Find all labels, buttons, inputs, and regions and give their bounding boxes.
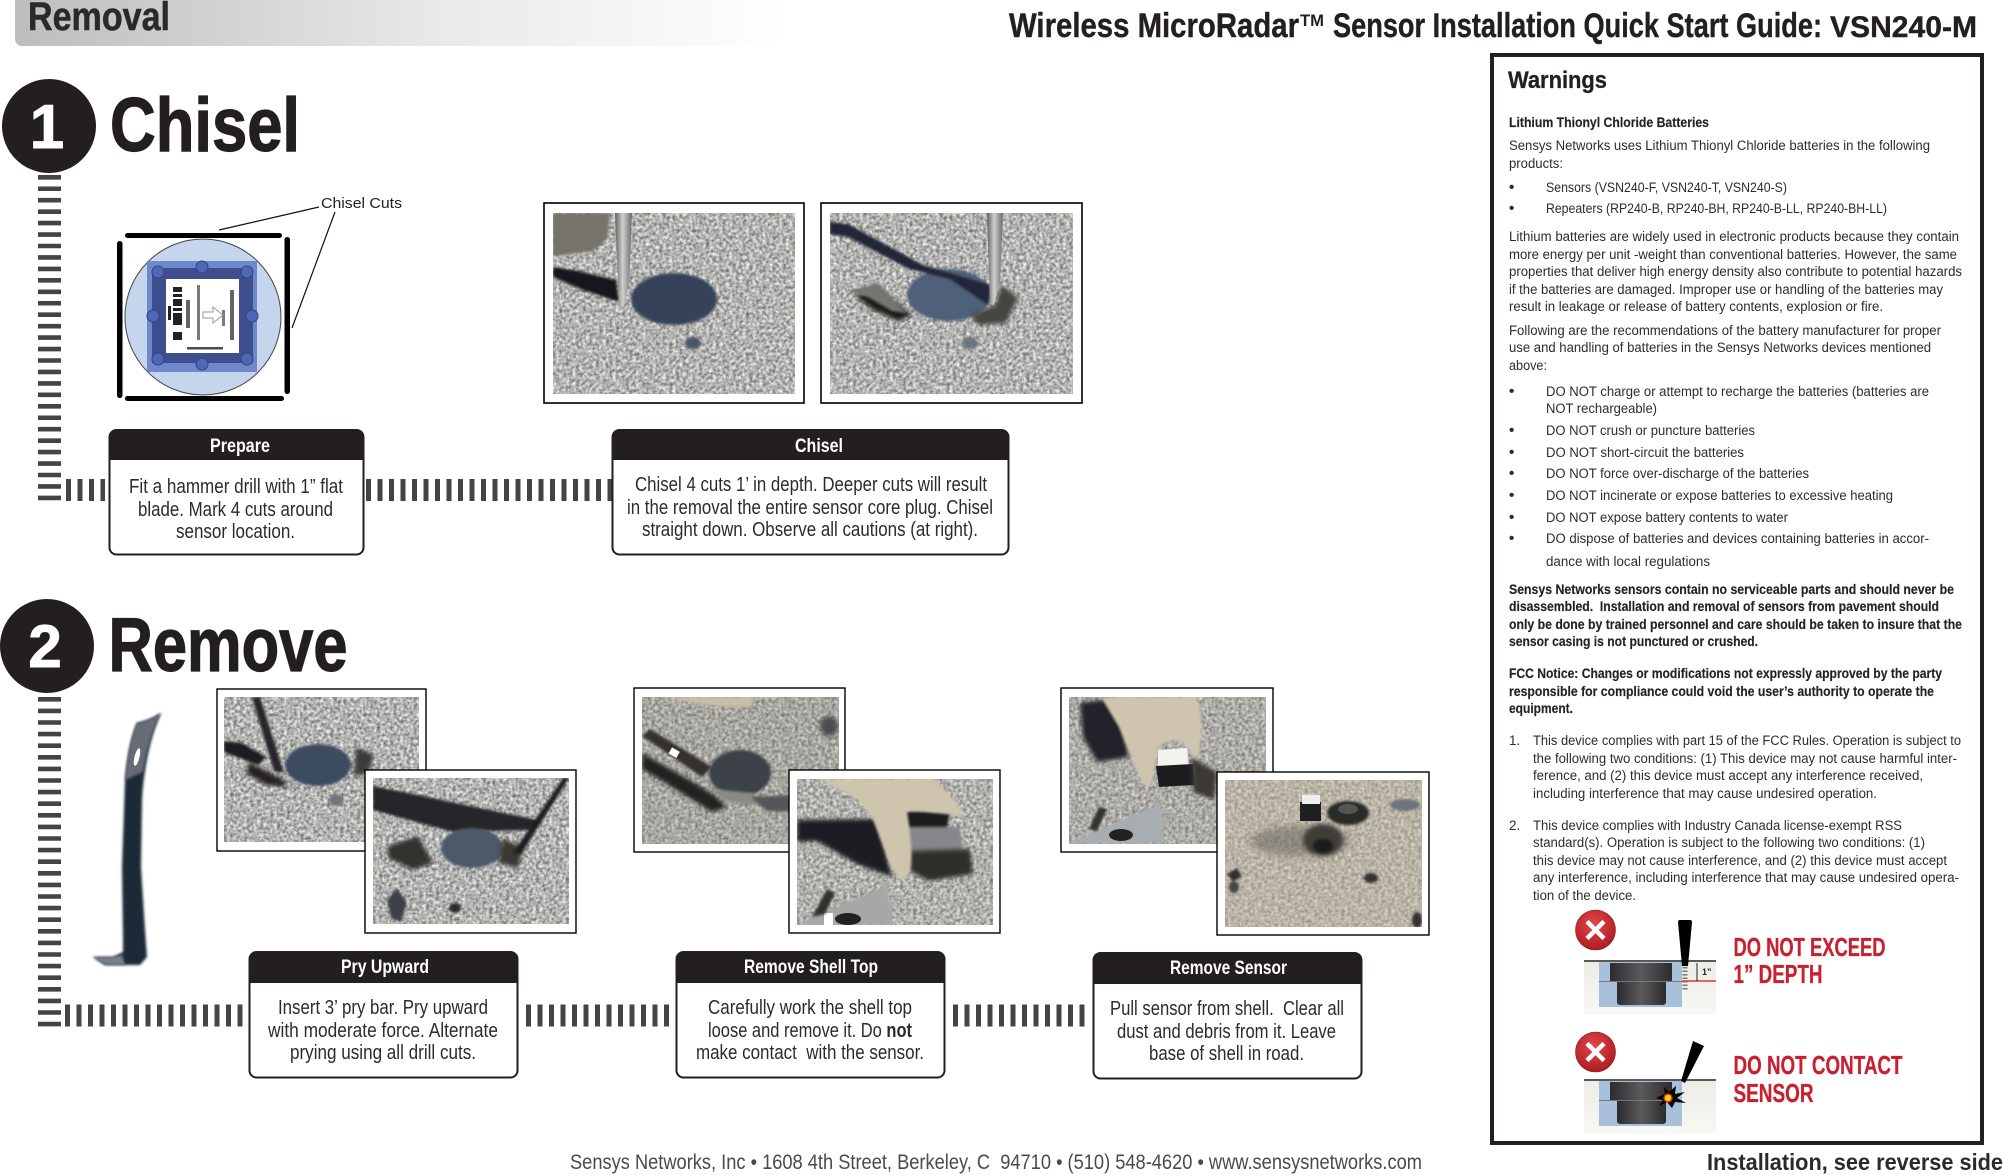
photo: hole after removal — [1217, 772, 1429, 935]
text: recommendations: • — [1509, 487, 1514, 504]
step card: Remove Shell Top: Remove Shell Top — [744, 957, 878, 978]
step 1 badge — [2, 79, 96, 173]
caution: do not contact sensor — [1576, 1032, 1903, 1134]
text: FCC notice: equipment. — [1509, 701, 1573, 716]
step 1 badge: 1 — [30, 93, 64, 162]
text: recommendations: • — [1509, 465, 1514, 482]
caution: do not exceed depth: 1” — [1702, 967, 1712, 977]
text: serviceable parts notice: Sensys Networks sensors contain no serviceable parts and should never be — [1509, 582, 1954, 597]
text: recommendations: • — [1509, 422, 1514, 439]
diagram: sensor with chisel cuts — [117, 196, 402, 401]
text: FCC item 1: ference, and (2) this device must accept any interference received, — [1533, 768, 1923, 783]
text: recommendations: Following are the recommendations of the battery manufacturer for proper — [1509, 323, 1942, 338]
step card: Pry Upward: Pry Upward — [341, 957, 429, 978]
text: FCC item 2: standard(s). Operation is subject to the following two conditions: (1) — [1533, 835, 1925, 850]
title: guide name: VSN240-M — [1830, 11, 1977, 44]
title: guide name: TM — [1300, 11, 1324, 30]
text: lithium hazards: more energy per unit -weight than conventional batteries. However, the same — [1509, 247, 1957, 262]
photo: chisel first cut — [544, 203, 804, 403]
step card: Pry Upward: prying using all drill cuts. — [290, 1042, 476, 1064]
step card: Remove Sensor: Pull sensor from shell. Clear all — [1110, 998, 1344, 1020]
photo: chisel after cuts — [821, 203, 1082, 403]
step 2 heading: Remove: Remove — [108, 603, 348, 688]
footer: contact line: Sensys Networks, Inc • 1608 4th Street, Berkeley, C 94710 • (510) 548-4620 • www.sensysnetworks.com — [570, 1151, 1422, 1174]
photo: pry bar first side — [217, 689, 426, 851]
text: lithium batteries intro: Repeaters (RP240-B, RP240-BH, RP240-B-LL, RP240-BH-LL) — [1546, 201, 1887, 216]
step card: Remove Sensor: dust and debris from it. Leave — [1117, 1021, 1336, 1043]
caution: do not contact sensor: DO NOT CONTACT — [1734, 1050, 1903, 1080]
step 2 badge — [0, 599, 94, 693]
step card: Chisel: Chisel — [795, 436, 843, 457]
step card: Pry Upward — [249, 952, 518, 1078]
step card: Remove Shell Top: Carefully work the shell top — [708, 997, 912, 1019]
text: FCC item 2: 2. — [1509, 818, 1520, 833]
text: lithium hazards — [1509, 229, 1962, 314]
photo: lift shell top — [789, 770, 1000, 933]
text: lithium batteries intro: Sensys Networks uses Lithium Thionyl Chloride batteries in the following — [1509, 138, 1930, 153]
text: recommendations: • — [1509, 444, 1514, 461]
text: lithium hazards: if the batteries are damaged. Improper use or handling of the batteries may — [1509, 282, 1943, 297]
text: FCC item 1 — [1509, 733, 1961, 801]
text: serviceable parts notice: sensor casing is not punctured or crushed. — [1509, 634, 1758, 649]
text: lithium batteries intro: • — [1509, 200, 1514, 217]
callout: Chisel Cuts: Chisel Cuts — [321, 196, 402, 212]
callout: Chisel Cuts — [219, 196, 402, 328]
step card: Prepare: sensor location. — [176, 521, 295, 543]
step card: Prepare: Prepare — [210, 436, 270, 457]
text: lithium batteries intro: • — [1509, 179, 1514, 196]
text: lithium hazards: properties that deliver high energy density also contribute to potential hazards — [1509, 264, 1962, 279]
title: guide name — [1009, 7, 1977, 45]
text: recommendations: use and handling of batteries in the Sensys Networks devices mentioned — [1509, 340, 1931, 355]
text: lithium batteries intro: Sensors (VSN240-F, VSN240-T, VSN240-S) — [1546, 180, 1787, 195]
step card: Chisel: in the removal the entire sensor core plug. Chisel — [627, 497, 993, 519]
caution: do not exceed depth: 1” DEPTH — [1734, 959, 1822, 989]
text: recommendations: DO NOT short-circuit the batteries — [1546, 445, 1744, 460]
text: FCC item 1: 1. — [1509, 733, 1520, 748]
title: guide name: Sensor Installation Quick Start Guide: — [1333, 7, 1822, 45]
step card: Remove Sensor: Remove Sensor — [1170, 958, 1287, 979]
text: FCC notice — [1509, 666, 1942, 716]
text: lithium batteries intro: products: — [1509, 156, 1563, 171]
step card: Pry Upward: with moderate force. Alternate — [267, 1020, 498, 1042]
caution: do not exceed depth: DO NOT EXCEED — [1734, 932, 1886, 962]
text: lithium hazards: Lithium batteries are widely used in electronic products because they contain — [1509, 229, 1959, 244]
text: serviceable parts notice: only be done by trained personnel and care should be taken to insure that the — [1509, 617, 1962, 632]
step card: Pry Upward: Insert 3’ pry bar. Pry upward — [278, 997, 488, 1019]
text: FCC item 1: the following two conditions: (1) This device may not cause harmful inter- — [1533, 751, 1957, 766]
text: recommendations: • — [1509, 509, 1514, 526]
step card: Remove Sensor — [1093, 953, 1362, 1078]
step card: Chisel: straight down. Observe all cautions (at right). — [642, 519, 978, 541]
step card: Remove Shell Top: loose and remove it. Do not — [708, 1020, 912, 1042]
text: recommendations: • — [1509, 383, 1514, 400]
photo: loosen shell top — [634, 688, 845, 852]
text: recommendations: DO dispose of batteries and devices containing batteries in accor- — [1546, 531, 1929, 546]
text: recommendations: NOT rechargeable) — [1546, 401, 1657, 416]
step card: Remove Shell Top: make contact with the sensor. — [696, 1042, 924, 1064]
step card: Chisel — [612, 430, 1009, 554]
text: FCC item 2: tion of the device. — [1533, 888, 1636, 903]
text: recommendations: DO NOT crush or puncture batteries — [1546, 423, 1755, 438]
text: recommendations — [1509, 323, 1942, 569]
header banner: Removal — [15, 0, 785, 46]
text: FCC item 2 — [1509, 818, 1959, 903]
text: serviceable parts notice — [1509, 582, 1962, 649]
caution: do not exceed depth — [1576, 910, 1886, 1015]
step card: Prepare: Fit a hammer drill with 1” flat — [129, 476, 343, 498]
text: recommendations: • — [1509, 530, 1514, 547]
text: recommendations: DO NOT charge or attempt to recharge the batteries (batteries are — [1546, 384, 1929, 399]
text: recommendations: above: — [1509, 358, 1547, 373]
text: recommendations: DO NOT incinerate or expose batteries to excessive heating — [1546, 488, 1893, 503]
step card: Remove Sensor: base of shell in road. — [1149, 1043, 1304, 1065]
text: recommendations: dance with local regulations — [1546, 554, 1710, 569]
text: serviceable parts notice: disassembled. Installation and removal of sensors from pavement should — [1509, 599, 1939, 614]
text: FCC item 1: including interference that may cause undesired operation. — [1533, 786, 1877, 801]
text: lithium hazards: result in leakage or release of battery contents, explosion or fire. — [1509, 299, 1883, 314]
text: recommendations: DO NOT expose battery contents to water — [1546, 510, 1789, 525]
caution: do not contact sensor: SENSOR — [1734, 1078, 1814, 1108]
icon: red X — [1576, 1032, 1616, 1072]
icon: pry bar — [93, 713, 161, 965]
photo: pull sensor from shell — [1061, 688, 1273, 852]
step 1 heading: Chisel: Chisel — [110, 83, 300, 168]
text: FCC item 2: any interference, including interference that may cause undesired opera- — [1533, 870, 1959, 885]
text: recommendations: DO NOT force over-discharge of the batteries — [1546, 466, 1809, 481]
text: FCC item 2: This device complies with Industry Canada license-exempt RSS — [1533, 818, 1902, 833]
text: FCC item 2: this device may not cause interference, and (2) this device must accept — [1533, 853, 1947, 868]
text: FCC item 1: This device complies with part 15 of the FCC Rules. Operation is subject to — [1533, 733, 1961, 748]
step card: Remove Shell Top — [676, 952, 945, 1078]
step card: Prepare: blade. Mark 4 cuts around — [138, 499, 333, 521]
text: FCC notice: FCC Notice: Changes or modifications not expressly approved by the party — [1509, 666, 1942, 681]
title: guide name: Wireless MicroRadar — [1009, 7, 1299, 45]
heading: Warnings: Warnings — [1508, 67, 1607, 94]
text: lithium batteries intro: Lithium Thionyl Chloride Batteries — [1509, 115, 1709, 130]
icon: red X — [1576, 910, 1616, 950]
panel: warnings — [1492, 55, 1982, 1143]
step 2 badge: 2 — [28, 613, 62, 680]
photo: pry bar second side — [365, 770, 576, 933]
text: FCC notice: responsible for compliance could void the user’s authority to operate the — [1509, 684, 1934, 699]
text: lithium batteries intro — [1509, 115, 1930, 217]
step card: Prepare — [109, 430, 364, 554]
step card: Chisel: Chisel 4 cuts 1’ in depth. Deeper cuts will result — [635, 474, 987, 496]
